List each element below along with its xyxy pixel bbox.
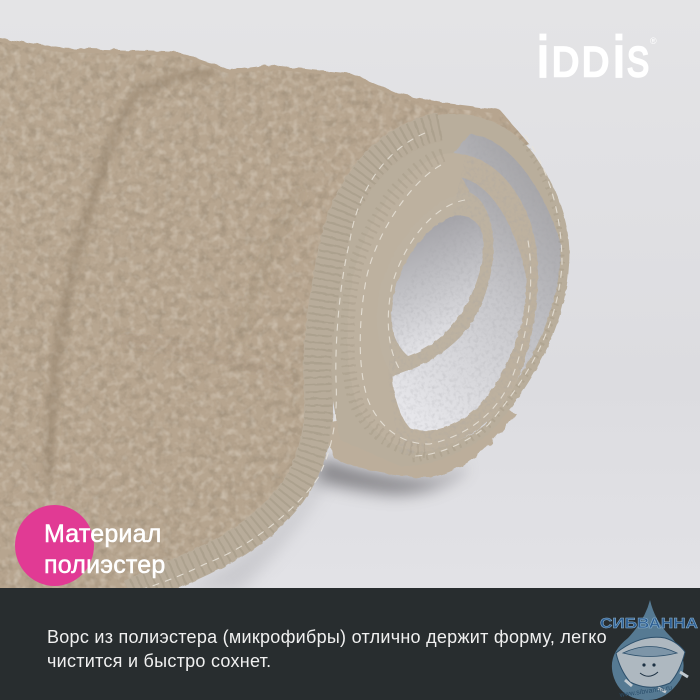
watermark word: СИБВАННА [600,615,698,632]
photo: rolled beige bath mat on grey background [0,38,570,588]
roll centre [391,215,483,356]
binding edge: front of mat [130,127,562,594]
second backing [392,178,526,431]
shadow under front edge [188,486,320,588]
badge heading [44,520,165,579]
mat pile body [0,38,530,610]
icon: water drop [612,600,684,700]
icon: bathtub [616,637,688,692]
badge heading: полиэстер [44,551,165,579]
caption text: чистится и быстро сохнет. [47,651,271,671]
logo: iddis [536,25,657,85]
pile under roll [329,410,517,478]
logo: iddis: D [552,38,579,85]
watermark url: www.sibvanna.ru [618,685,673,699]
knit texture [392,284,526,429]
badge: pink circle [15,505,94,586]
binding stitching [140,133,562,590]
second coil binding [430,152,538,450]
outer backing [454,134,561,440]
caption text: Ворс из полиэстера (микрофибры) отлично держит форму, легко [47,627,607,647]
roll [318,114,569,466]
badge heading: Материал [44,520,162,548]
third coil binding [392,192,494,376]
logo: iddis: D [582,38,609,85]
watermark: Sibvanna bath logo [600,600,698,700]
logo: iddis: S [627,38,649,85]
bottom caption bar [0,588,700,700]
shadow under roll [312,458,470,494]
roll outer silhouette [332,114,570,421]
logo: iddis: ® [650,36,657,46]
caption text [47,627,607,671]
pile seam grooves [42,66,260,480]
